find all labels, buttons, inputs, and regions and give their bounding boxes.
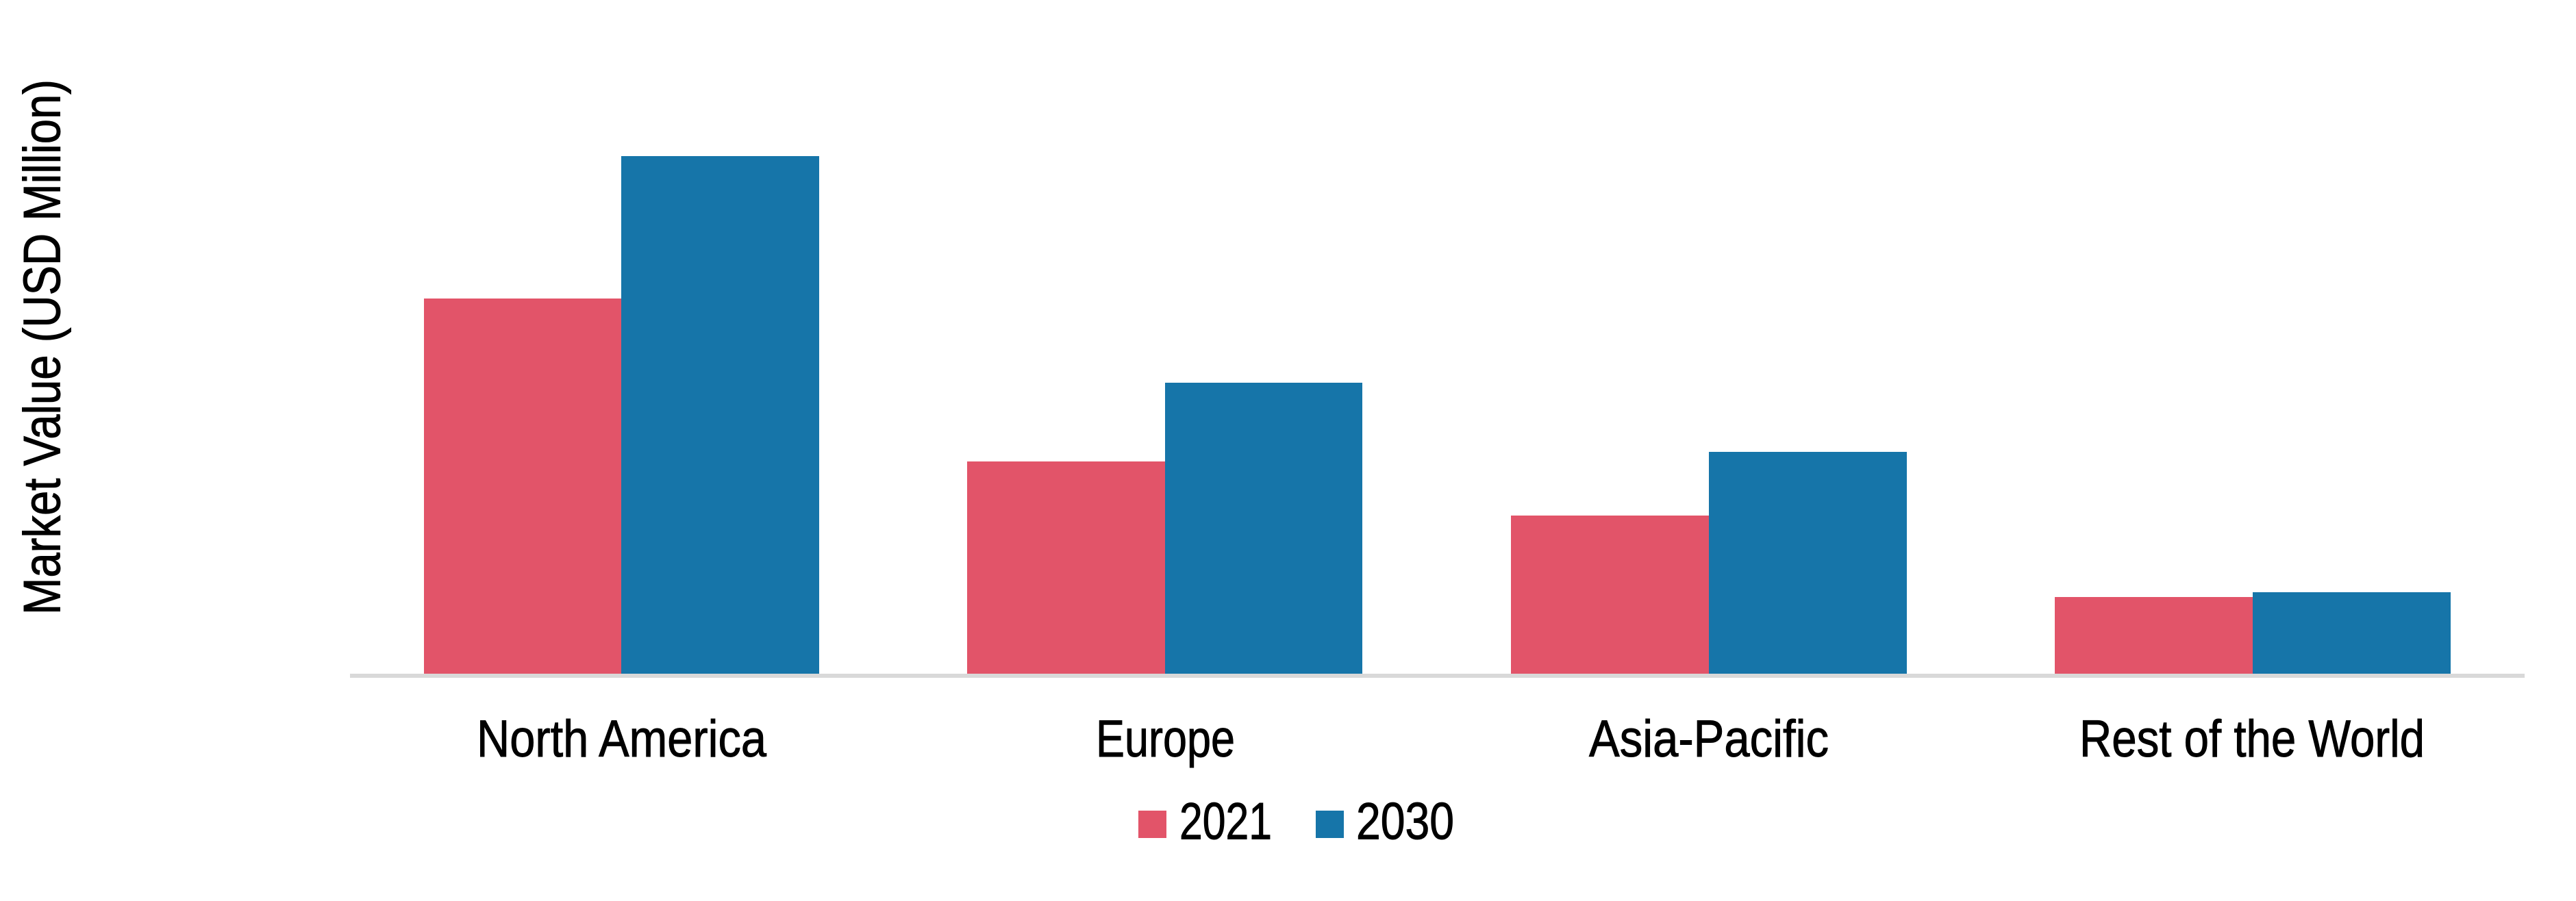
bars: Rest of the World <box>2055 592 2451 674</box>
y-axis title: Market Value (USD Million) <box>14 79 71 615</box>
label: North America: North America <box>477 710 767 768</box>
bar: North America 2021 <box>424 299 621 674</box>
bar: Rest of the World 2021 <box>2055 597 2253 674</box>
category labels <box>477 710 2425 768</box>
legend swatch: 2021 <box>1138 811 1166 838</box>
label: Asia-Pacific: Asia-Pacific <box>1589 710 1829 768</box>
bar: North America 2030 <box>621 156 819 674</box>
bar: Europe 2030 <box>1165 383 1362 674</box>
bar: Rest of the World 2030 <box>2253 592 2451 674</box>
bar: Asia-Pacific 2021 <box>1511 516 1709 674</box>
legend label: 2021: 2021 <box>1179 793 1272 850</box>
label: Rest of the World: Rest of the World <box>2079 710 2425 768</box>
label: Europe: Europe <box>1096 710 1235 768</box>
bar: Asia-Pacific 2030 <box>1709 452 1907 674</box>
legend <box>1138 793 1454 850</box>
bars: North America <box>424 156 819 674</box>
legend swatch: 2030 <box>1316 811 1344 838</box>
x-axis line <box>350 674 2525 678</box>
legend label: 2030: 2030 <box>1356 793 1454 850</box>
bars: Asia-Pacific <box>1511 452 1907 674</box>
bar: Europe 2021 <box>967 461 1165 674</box>
bars: Europe <box>967 383 1362 674</box>
